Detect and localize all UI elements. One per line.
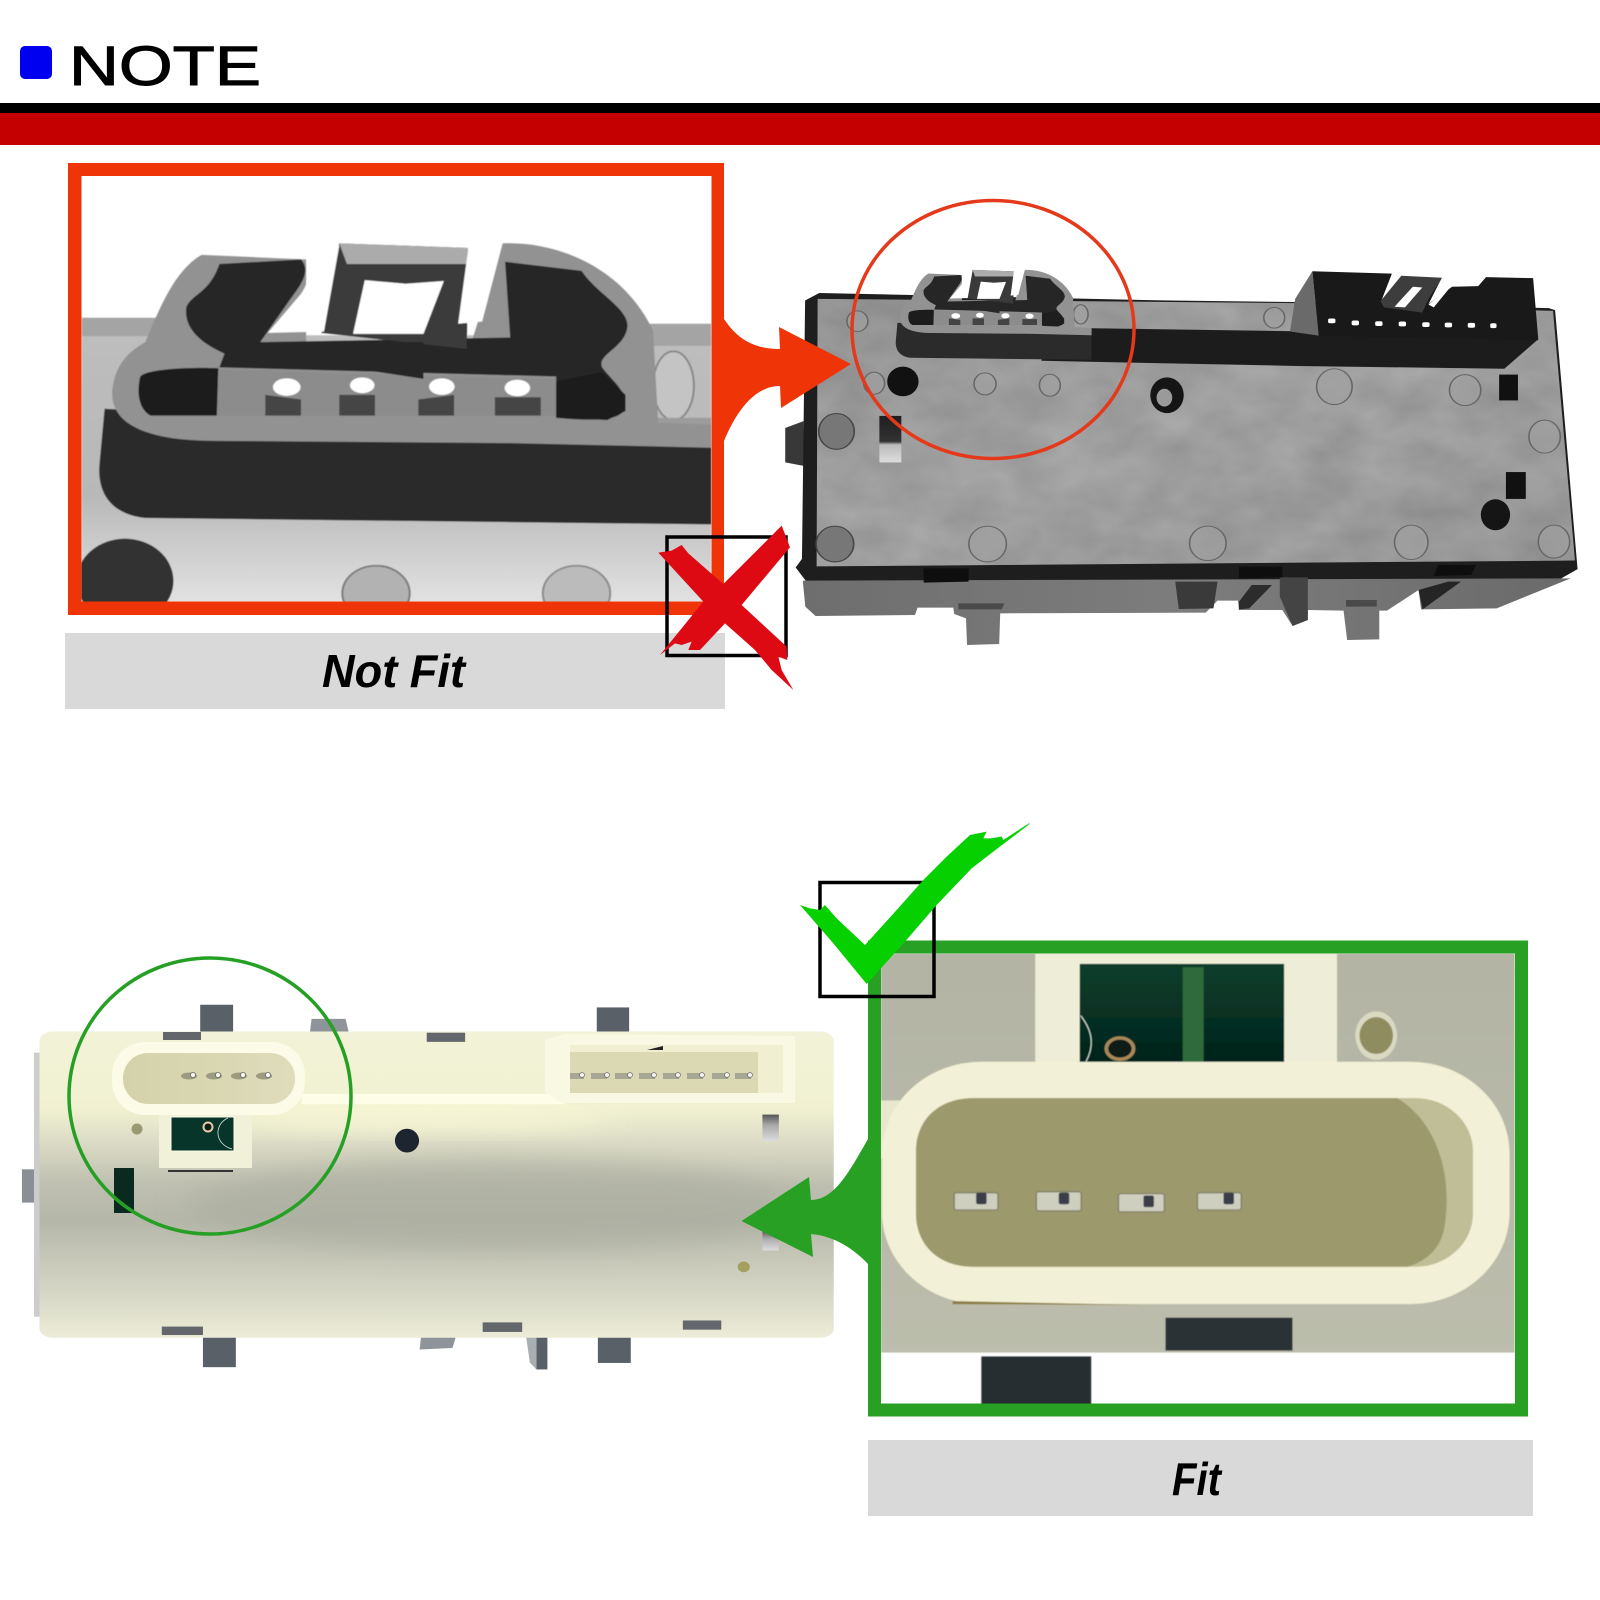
header: NOTE — [20, 34, 261, 97]
arrow: red pointing to module — [724, 319, 851, 441]
arrow: green pointing to module — [742, 1139, 868, 1264]
callout circle: red — [852, 200, 1134, 458]
small connector — [896, 270, 1092, 360]
connector rail — [1042, 328, 1538, 369]
title: NOTE — [69, 34, 261, 97]
four pin connector — [112, 1042, 305, 1115]
label bar: Fit: Fit — [1172, 1453, 1222, 1505]
connector tabs — [200, 1005, 631, 1369]
panel: fit close-up photo — [868, 940, 1528, 1416]
module side wall and tabs — [803, 565, 1571, 645]
pcb window — [159, 1112, 252, 1172]
label bar: Fit — [868, 1440, 1533, 1516]
icon: blue square bullet — [20, 46, 52, 79]
icon: box with red cross — [658, 526, 793, 690]
header rule: black and red bars — [0, 103, 1600, 145]
module body — [39, 1032, 834, 1338]
label bar: Not Fit — [65, 633, 725, 709]
photo: black module — [785, 270, 1578, 645]
label bar: Not Fit: Not Fit — [322, 645, 467, 697]
eight pin connector — [545, 1034, 795, 1103]
notch: top — [163, 1032, 201, 1040]
large connector — [1290, 271, 1538, 340]
callout circle: green — [69, 958, 351, 1234]
photo: cream module — [22, 1005, 834, 1369]
module base plate — [796, 293, 1578, 581]
panel: not fit close-up photo — [68, 163, 724, 623]
icon: box with green check — [800, 823, 1030, 996]
